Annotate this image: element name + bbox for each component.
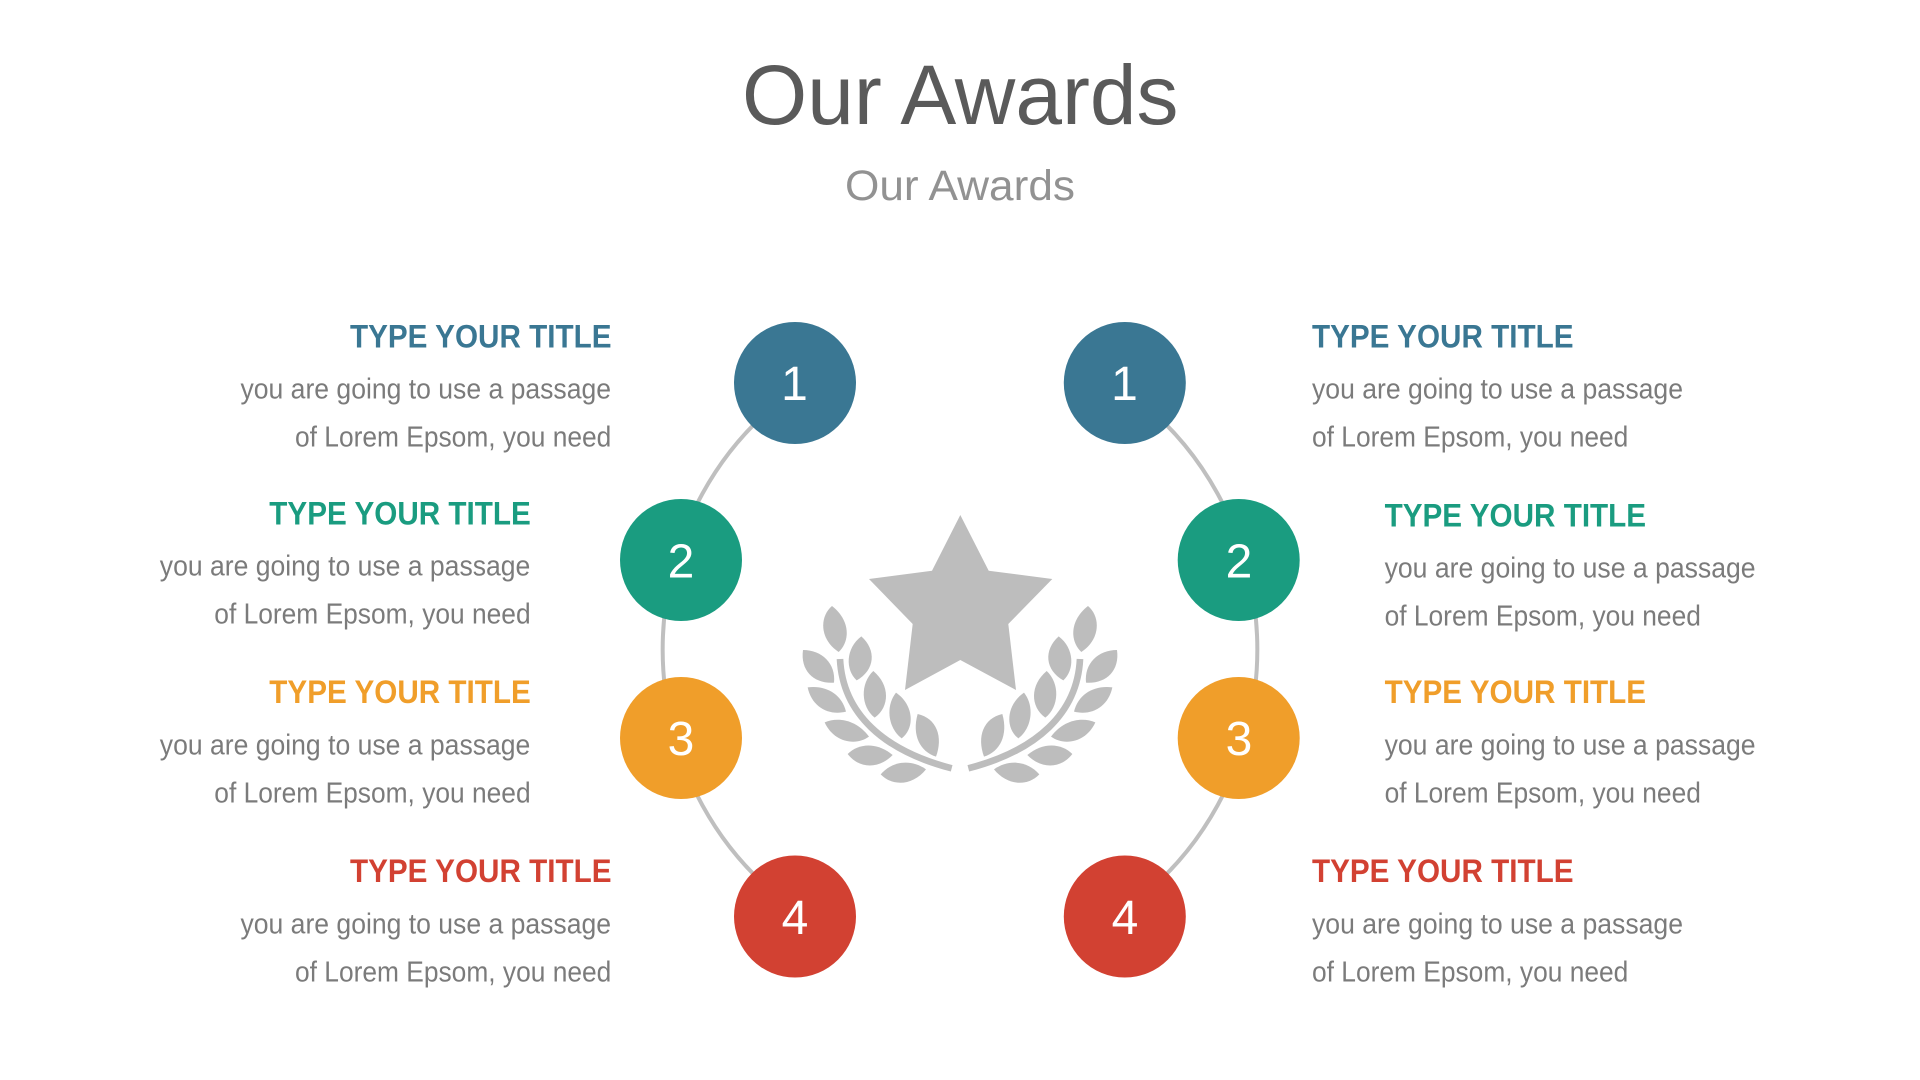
badge: right 4 [1064,856,1186,978]
text block: right 3: TYPE YOUR TITLE [1385,674,1646,710]
text block: left 2: TYPE YOUR TITLE [269,496,531,532]
text block: left 4 [240,853,612,989]
icon: left laurel branch [803,606,952,783]
badge: left 1 [734,322,856,444]
title: Our Awards [742,48,1178,142]
text block: left 2: you are going to use a passage [160,551,530,583]
text block: left 2: of Lorem Epsom, you need [214,599,531,631]
text block: left 3 [160,674,531,810]
text block: right 3: of Lorem Epsom, you need [1385,778,1701,810]
badge: left 2 [620,499,742,621]
text block: left 4: of Lorem Epsom, you need [295,957,611,989]
badge: right 3 [1178,677,1300,799]
badge: left 4 [734,856,856,978]
text block: right 4: of Lorem Epsom, you need [1312,957,1628,989]
text block: right 2: TYPE YOUR TITLE [1385,498,1646,534]
badge: right 4: 4 [1112,892,1138,945]
text block: left 3: TYPE YOUR TITLE [269,674,531,710]
text block: left 3: you are going to use a passage [160,729,530,761]
text block: right 4: TYPE YOUR TITLE [1312,853,1574,889]
text block: right 2: you are going to use a passage [1385,553,1756,585]
badge: left 2: 2 [668,536,694,588]
text block: right 1: of Lorem Epsom, you need [1312,422,1628,454]
text block: left 2 [160,496,531,631]
text block: right 4: you are going to use a passage [1312,908,1683,940]
subtitle: Our Awards [845,162,1075,210]
text block: right 2 [1385,498,1756,633]
text block: left 1: of Lorem Epsom, you need [295,422,611,454]
badge: left 1: 1 [781,358,808,411]
badge: right 1 [1064,322,1186,444]
icon: star with laurel wreath [803,515,1117,783]
text block: left 1: TYPE YOUR TITLE [350,318,612,354]
text block: right 1 [1312,318,1683,454]
badge: right 2: 2 [1226,536,1252,588]
text block: right 4 [1312,853,1683,989]
badge: left 3: 3 [668,713,694,766]
text block: right 1: TYPE YOUR TITLE [1312,318,1574,354]
badge: right 3: 3 [1226,713,1252,766]
icon: right laurel branch [968,606,1117,783]
text block: left 4: TYPE YOUR TITLE [350,853,612,889]
badge: left 3 [620,677,742,799]
badge: right 1: 1 [1111,358,1138,411]
left connecting arc [663,390,795,909]
badge: right 2 [1178,499,1300,621]
text block: right 3 [1385,674,1756,810]
icon: star [869,515,1052,690]
text block: left 4: you are going to use a passage [240,908,611,940]
text block: right 3: you are going to use a passage [1385,729,1756,761]
text block: left 3: of Lorem Epsom, you need [214,778,531,810]
text block: right 2: of Lorem Epsom, you need [1385,601,1701,633]
text block: right 1: you are going to use a passage [1312,373,1683,405]
text block: left 1 [240,318,612,454]
right connecting arc [1125,390,1257,909]
text block: left 1: you are going to use a passage [240,373,611,405]
badge: left 4: 4 [782,892,808,945]
